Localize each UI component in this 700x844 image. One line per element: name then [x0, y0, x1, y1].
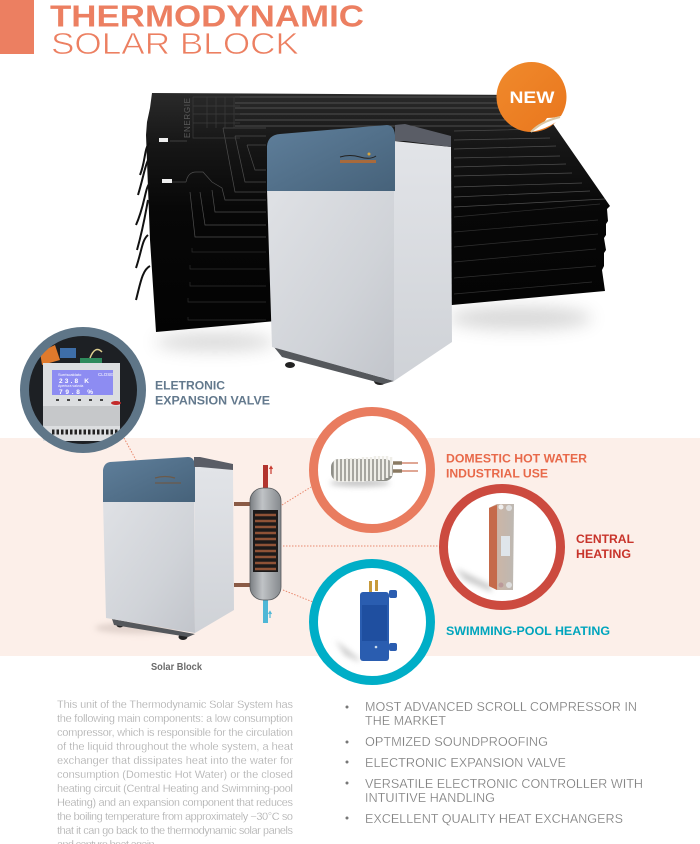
feature list: EXCELLENT QUALITY HEAT EXCHANGERS — [365, 811, 623, 826]
circle: swimming-pool heating — [314, 564, 430, 680]
product: solar block unit — [267, 124, 452, 385]
label: central heating: CENTRAL — [576, 534, 634, 546]
label: domestic hot water: DOMESTIC HOT WATER — [446, 454, 588, 466]
unit base — [274, 347, 394, 384]
label: electronic expansion valve: ELETRONIC — [155, 380, 225, 392]
controller vents — [52, 430, 118, 434]
controller body — [43, 363, 120, 441]
feature list: MOST ADVANCED SCROLL COMPRESSOR IN — [365, 699, 637, 714]
plate exchanger — [489, 504, 514, 590]
pool exchanger shadow — [335, 640, 360, 662]
body text: that it can go back to the thermodynamic solar panels — [57, 825, 294, 837]
panel grooves — [170, 97, 605, 320]
body text: of the liquid throughout the whole system, a heat — [57, 741, 293, 753]
small unit feet — [116, 622, 188, 640]
small unit shadow — [95, 622, 185, 634]
panel connectors — [136, 138, 172, 300]
valve ring — [24, 332, 142, 448]
unit logo — [340, 152, 376, 163]
controller screen: 79.8 % — [59, 389, 93, 396]
label: central heating — [576, 534, 634, 561]
controller screen: CLOSE — [98, 372, 113, 377]
body text: heating circuit (Central Heating and Swimming-pool — [57, 783, 293, 795]
copper coil — [253, 510, 278, 572]
label: electronic expansion valve: EXPANSION VALVE — [155, 396, 270, 408]
small unit cover — [103, 457, 195, 502]
label: swimming-pool heating: SWIMMING-POOL HEATING — [446, 626, 610, 638]
body text: compressor, which is responsible for the circulation — [57, 727, 293, 739]
body text: the following main components: a low consumption — [57, 713, 293, 725]
controller screen — [52, 370, 113, 396]
unit top cover — [267, 125, 395, 191]
label: electronic expansion valve — [155, 380, 270, 408]
feature list: THE MARKET — [365, 713, 446, 728]
small unit front — [103, 501, 195, 633]
caption: solar block: Solar Block — [151, 662, 202, 673]
feature list: VERSATILE ELECTRONIC CONTROLLER WITH — [365, 776, 643, 791]
label: central heating: HEATING — [576, 549, 631, 561]
coil shadow — [330, 480, 390, 486]
feature list: OPTMIZED SOUNDPROOFING — [365, 734, 548, 749]
white coil — [331, 456, 418, 482]
circle: domestic hot water — [314, 412, 430, 528]
unit front panel — [267, 190, 394, 381]
feature list: ELECTRONIC EXPANSION VALVE — [365, 755, 566, 770]
product: small solar block unit — [95, 457, 234, 640]
unit side panel — [394, 141, 452, 381]
body text: exchanger that dissipates heat into the water for — [57, 755, 293, 767]
controller buttons — [56, 399, 110, 401]
unit feet — [285, 362, 386, 385]
feature list: INTUITIVE HANDLING — [365, 790, 495, 805]
dotted connectors — [124, 438, 439, 602]
pipes — [234, 465, 268, 623]
circle: electronic expansion valve — [24, 332, 142, 448]
small unit side — [194, 466, 234, 633]
title — [50, 0, 364, 61]
badge: new — [496, 62, 566, 132]
controller screen: 23.8 K — [59, 378, 89, 385]
feature list — [346, 699, 643, 826]
title: SOLAR BLOCK — [51, 26, 299, 61]
controller lower module — [43, 406, 120, 426]
arrows — [268, 466, 272, 618]
solar panel stack — [136, 93, 610, 332]
controller screen: Apertura valvola — [58, 384, 83, 388]
controller wiring — [40, 345, 102, 365]
circle: central heating — [444, 488, 560, 606]
unit top side band — [395, 124, 451, 147]
controller button — [111, 401, 121, 405]
body text — [57, 699, 294, 844]
body text: This unit of the Thermodynamic Solar System has — [57, 699, 294, 711]
body text: Heating) and an expansion component that reduces — [57, 797, 294, 809]
label: domestic hot water — [446, 454, 588, 480]
panel brand: ENERGIE — [183, 98, 192, 138]
heat exchanger vessel — [234, 465, 281, 623]
exchanger shadow — [455, 568, 492, 592]
band: pink background — [0, 438, 700, 656]
vessel shell — [250, 488, 281, 600]
floor shadow — [155, 306, 592, 351]
body text: consumption (Domestic Hot Water) or the closed — [57, 769, 293, 781]
small unit logo — [155, 476, 181, 483]
small unit side band — [194, 457, 233, 470]
badge: new: NEW — [510, 88, 556, 107]
body text: the boiling temperature from approximately −30°C so — [57, 811, 293, 823]
title accent block — [0, 0, 34, 54]
controller screen: Surriscaldato — [58, 372, 82, 377]
blue cylinder — [360, 580, 397, 661]
small unit base — [112, 619, 195, 637]
label: domestic hot water: INDUSTRIAL USE — [446, 468, 548, 480]
